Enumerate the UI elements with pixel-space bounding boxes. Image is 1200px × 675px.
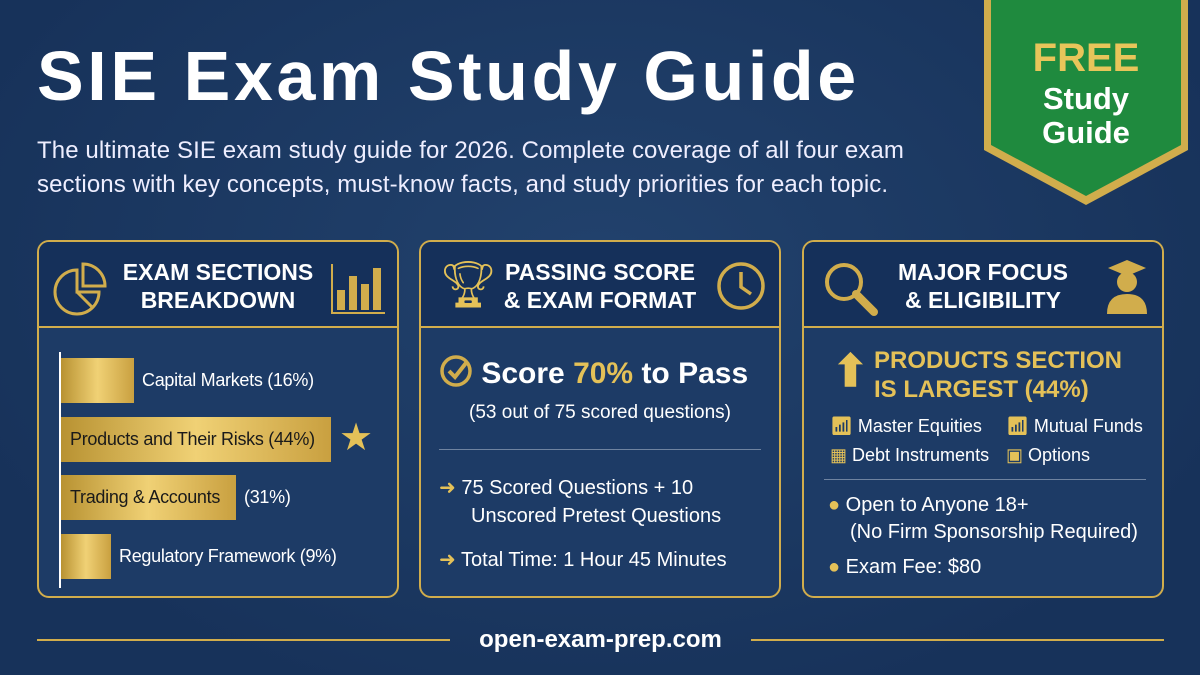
panel header: MAJOR FOCUS <box>898 259 1068 285</box>
score subtext: (53 out of 75 scored questions) <box>469 402 731 423</box>
bar: regulatory <box>61 534 111 579</box>
bar: products: Products and Their Risks (44%) <box>70 429 315 449</box>
callout: products largest: PRODUCTS SECTION <box>874 347 1122 374</box>
list: format: ➜ Total Time: 1 Hour 45 Minutes <box>439 549 727 571</box>
list: product topics: ▦ Debt Instruments <box>830 445 989 465</box>
title: SIE Exam Study Guide <box>37 37 860 115</box>
badge: free study guide: Study <box>1043 81 1129 116</box>
list: eligibility: (No Firm Sponsorship Required) <box>850 521 1138 543</box>
callout: products largest <box>832 347 1122 403</box>
panel: major focus <box>802 240 1164 598</box>
bar: products <box>61 417 331 462</box>
list: product topics: ▣ Options <box>1006 445 1090 465</box>
list: eligibility: ● Open to Anyone 18+ <box>828 494 1029 516</box>
panel: exam sections breakdown: Capital Markets (16%) <box>142 370 314 390</box>
panel header: BREAKDOWN <box>141 287 295 313</box>
panel: exam sections breakdown: Regulatory Framework (9%) <box>119 546 337 566</box>
subtitle: sections with key concepts, must-know facts, and study priorities for each topic. <box>37 171 888 198</box>
bar: trading: Trading & Accounts <box>70 487 220 507</box>
panel header <box>421 242 779 328</box>
bar: trading <box>61 475 236 520</box>
panel: exam sections breakdown <box>37 240 399 598</box>
panel: passing score <box>419 240 781 598</box>
icon: star: ★ <box>339 417 373 459</box>
axis <box>59 352 61 588</box>
panel header <box>804 242 1162 328</box>
bar: capital markets <box>61 358 134 403</box>
badge: free study guide <box>984 0 1188 205</box>
badge: free study guide: FREE <box>1033 36 1139 80</box>
list: format: ➜ 75 Scored Questions + 10 <box>439 477 693 499</box>
callout: products largest: IS LARGEST (44%) <box>874 376 1089 403</box>
panel header: EXAM SECTIONS <box>123 259 313 285</box>
icon: magnifier <box>825 263 878 316</box>
list: eligibility <box>828 494 1138 578</box>
subtitle: The ultimate SIE exam study guide for 2026. Complete coverage of all four exam <box>37 137 904 164</box>
list: format: Unscored Pretest Questions <box>471 505 721 527</box>
badge: free study guide: Guide <box>1042 115 1130 150</box>
subtitle <box>37 137 904 198</box>
list: product topics: 📶︎ Mutual Funds <box>1006 416 1143 436</box>
list: product topics <box>830 416 1143 465</box>
list: format <box>439 477 727 571</box>
icon: bar chart <box>331 264 385 314</box>
panel header: & ELIGIBILITY <box>905 287 1061 313</box>
panel header: & EXAM FORMAT <box>504 287 696 313</box>
icon: trophy: 🏆︎ <box>439 258 497 310</box>
panel header <box>39 242 397 328</box>
footer: open-exam-prep.com <box>479 626 722 653</box>
list: product topics: 📶︎ Master Equities <box>830 416 982 436</box>
list: eligibility: ● Exam Fee: $80 <box>828 556 981 578</box>
icon: graduate <box>1107 260 1147 314</box>
score headline: Score 70% to Pass <box>481 357 748 390</box>
icon: pie chart <box>54 262 106 316</box>
callout: products largest: ⬆ <box>832 347 869 396</box>
panel header: PASSING SCORE <box>505 259 695 285</box>
panel: exam sections breakdown: (31%) <box>244 487 291 507</box>
icon: clock <box>717 262 765 310</box>
